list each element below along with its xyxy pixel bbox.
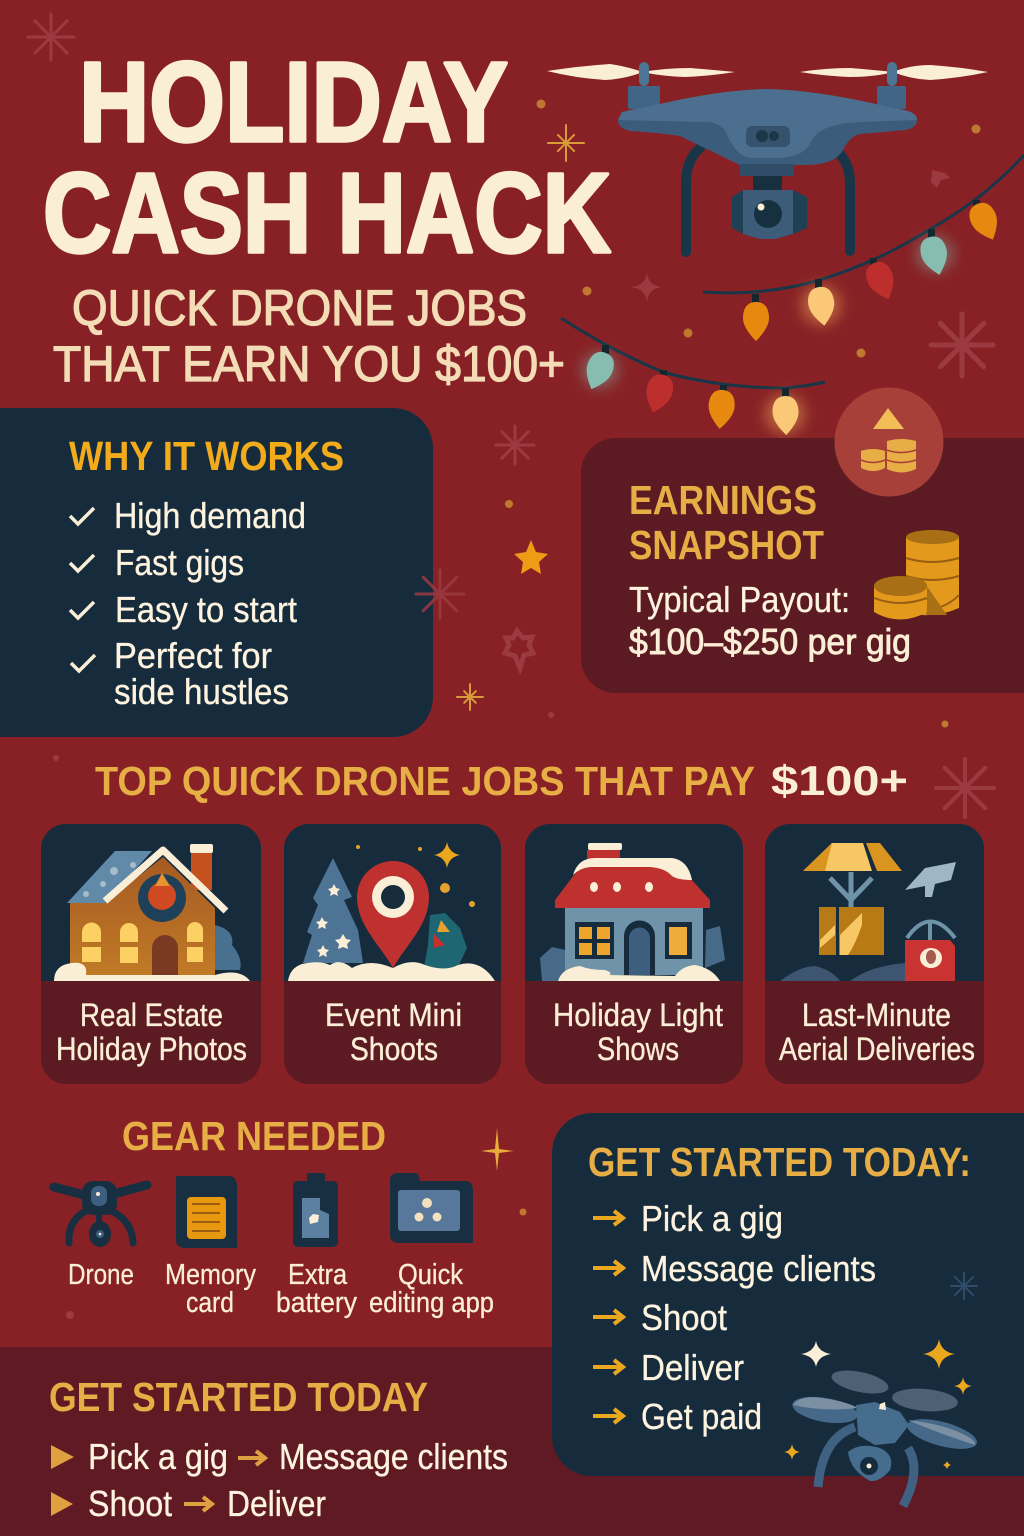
icon: battery	[293, 1173, 338, 1247]
caption	[325, 997, 462, 1067]
payout text: $100–$250 per gig	[629, 621, 911, 662]
heading: gear needed: GEAR NEEDED	[122, 1113, 386, 1159]
caption: Last-Minute	[802, 997, 951, 1033]
checklist: Perfect for	[114, 635, 272, 676]
payout text: Typical Payout:	[629, 579, 850, 620]
icon: parachute package	[780, 843, 956, 981]
subtitle: THAT EARN YOU $100+	[53, 336, 565, 392]
caption	[56, 997, 247, 1067]
card: holiday light shows	[525, 824, 743, 1084]
gear labels: Extra	[288, 1259, 348, 1291]
heading: earnings snapshot: SNAPSHOT	[629, 522, 824, 568]
card: real estate	[41, 824, 261, 1084]
icon: snowy house	[540, 843, 725, 981]
steps: Message clients	[279, 1436, 508, 1477]
icon: editing app	[390, 1173, 473, 1243]
caption	[553, 997, 723, 1067]
steps: Pick a gig	[88, 1436, 228, 1477]
gear labels: Quick	[398, 1259, 463, 1291]
step list: Deliver	[641, 1347, 744, 1388]
heading: why it works: WHY IT WORKS	[69, 433, 344, 479]
icon: circle with coins	[834, 388, 944, 496]
caption: Holiday Light	[553, 997, 723, 1033]
illustration: string lights	[561, 155, 1024, 435]
steps	[51, 1436, 508, 1524]
step list: Shoot	[641, 1297, 727, 1338]
icon: drone	[54, 1181, 147, 1247]
icon: small drone with sparkles	[784, 1339, 980, 1506]
heading: earnings snapshot: EARNINGS	[629, 477, 817, 523]
checklist	[70, 495, 306, 712]
gear labels: card	[186, 1287, 234, 1319]
step list: Pick a gig	[641, 1198, 783, 1239]
panel: why it works	[0, 408, 433, 737]
subtitle	[53, 280, 565, 392]
checklist: High demand	[114, 495, 306, 536]
steps: Deliver	[227, 1483, 326, 1524]
steps: Shoot	[88, 1483, 172, 1524]
heading: top quick drone jobs: $100+	[771, 757, 908, 804]
icon: house with wreath	[54, 844, 250, 981]
caption: Event Mini	[325, 997, 462, 1033]
checklist: Fast gigs	[115, 542, 244, 583]
caption: Real Estate	[80, 997, 223, 1033]
caption: Shoots	[350, 1031, 438, 1067]
heading: get started today: GET STARTED TODAY	[49, 1374, 428, 1420]
heading: earnings snapshot	[629, 477, 824, 568]
arrows	[593, 1211, 623, 1423]
panel: get started today band	[0, 1347, 1024, 1536]
step list: Message clients	[641, 1248, 876, 1289]
subtitle: QUICK DRONE JOBS	[72, 280, 527, 336]
caption: Shows	[597, 1031, 679, 1067]
card: event mini shoots	[284, 824, 501, 1084]
title: HOLIDAY	[79, 39, 508, 165]
icon: coin stacks	[874, 530, 959, 620]
title: CASH HACK	[43, 150, 611, 276]
panel: gear needed	[54, 1113, 494, 1319]
gear labels: Memory	[165, 1259, 256, 1291]
step list	[641, 1198, 876, 1437]
checklist: side hustles	[114, 671, 289, 712]
gear labels: Drone	[68, 1259, 134, 1291]
gear labels	[68, 1259, 494, 1319]
illustration: drone	[547, 62, 988, 252]
heading: top quick drone jobs: TOP QUICK DRONE JOBS THAT PAY	[95, 758, 755, 804]
checklist: Easy to start	[115, 589, 297, 630]
caption	[779, 997, 975, 1067]
payout text	[629, 579, 911, 662]
step list: Get paid	[641, 1396, 762, 1437]
panel: earnings snapshot	[581, 388, 1024, 693]
panel: get started today checklist	[552, 1113, 1024, 1506]
caption: Aerial Deliveries	[779, 1031, 975, 1067]
caption: Holiday Photos	[56, 1031, 247, 1067]
card: last-minute aerial deliveries	[765, 824, 984, 1084]
icon: memory card	[176, 1176, 237, 1248]
title	[43, 39, 611, 276]
gear labels: editing app	[369, 1287, 494, 1319]
icon: tree and location pin	[288, 842, 495, 981]
gear labels: battery	[276, 1287, 357, 1319]
heading: GET STARTED TODAY:	[588, 1139, 971, 1185]
